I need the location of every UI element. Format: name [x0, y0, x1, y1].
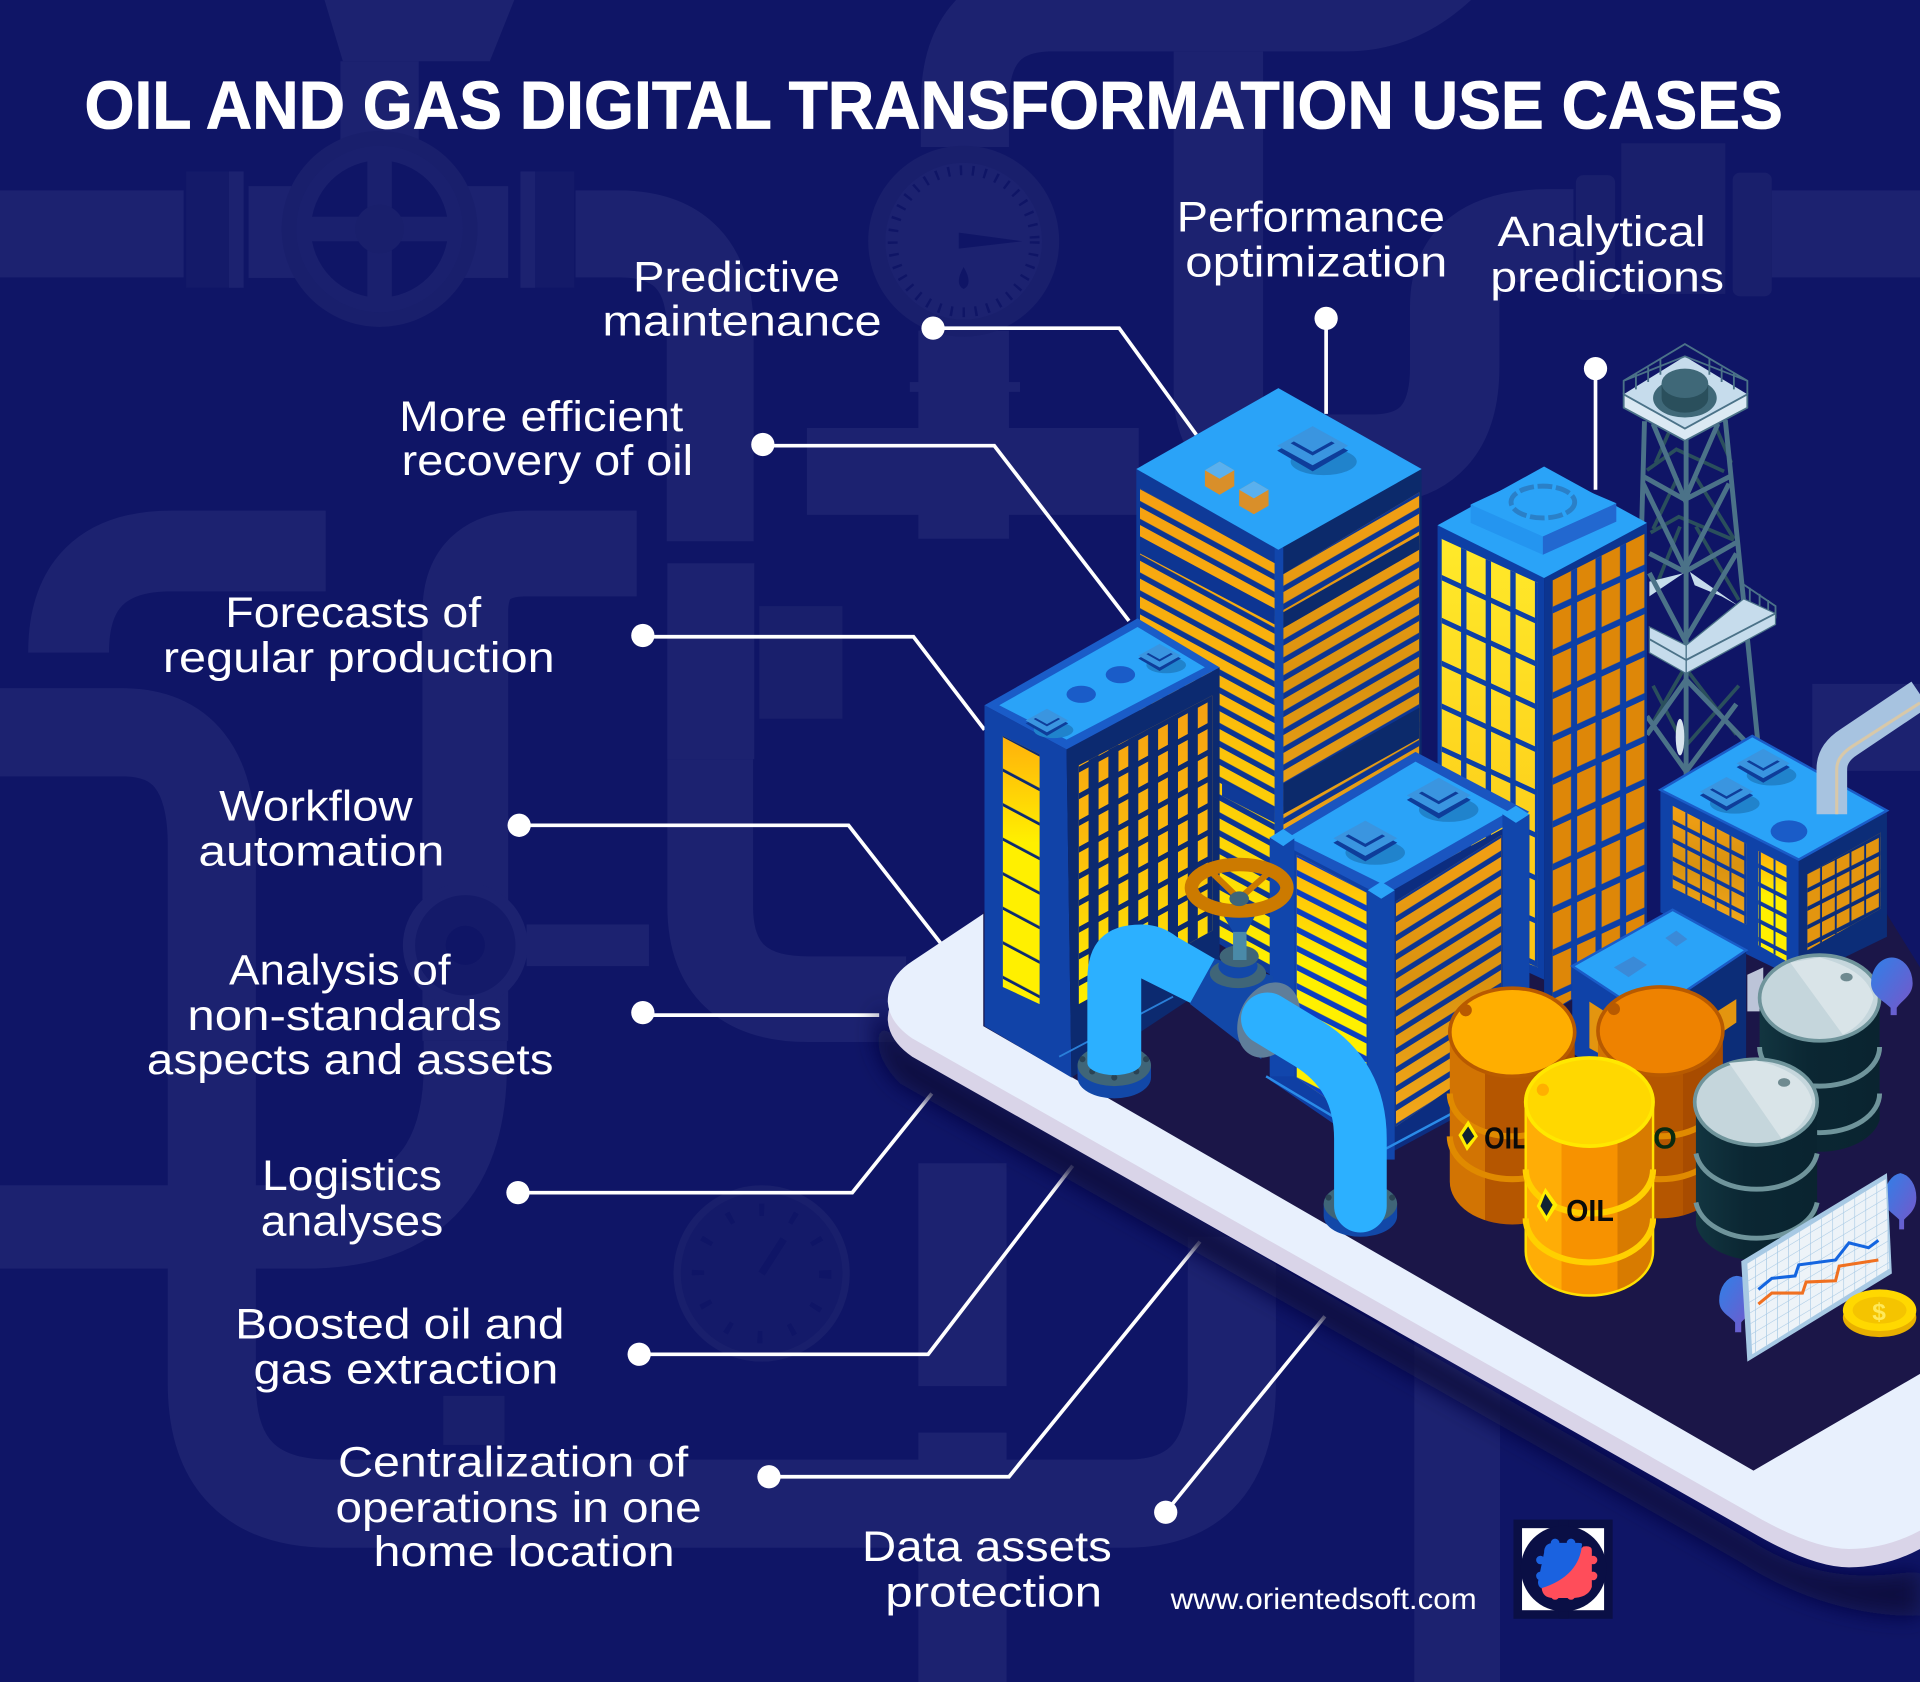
label: predictive maintenance: maintenance — [602, 298, 882, 346]
connector: workflow automation — [519, 825, 940, 943]
label: forecasts of regular production: regular production — [163, 634, 555, 682]
connector: centralization — [769, 1242, 1200, 1477]
hook — [1676, 719, 1684, 756]
base line — [1059, 997, 1173, 1057]
flange collar — [1225, 972, 1312, 1068]
oil rig tower — [1624, 344, 1776, 784]
label: data assets protection — [862, 1523, 1112, 1617]
label: performance optimization — [1177, 193, 1447, 287]
rooftop stack — [1277, 426, 1357, 475]
building: left front tower — [984, 618, 1220, 1078]
barrel: orange right — [1598, 987, 1723, 1218]
left flange — [1078, 1044, 1151, 1098]
rooftop stacks — [1737, 749, 1796, 786]
label: more efficient recovery of oil: recovery of oil — [402, 437, 693, 485]
label: forecasts of regular production: Forecasts of — [225, 589, 481, 637]
label: analytical predictions: Analytical — [1498, 208, 1706, 256]
label: logistics analyses — [261, 1152, 443, 1246]
rooftop stacks — [1407, 778, 1478, 822]
callout dots — [506, 307, 1607, 1524]
label: performance optimization: Performance — [1177, 193, 1445, 241]
label: forecasts of regular production — [163, 589, 555, 682]
building: center front tower — [1266, 752, 1531, 1160]
connector: data protection — [1166, 1316, 1325, 1512]
base line — [1266, 1071, 1531, 1149]
label: centralization of operations: operations in one — [336, 1484, 702, 1532]
valve body — [1190, 959, 1273, 1059]
coin — [1843, 1289, 1916, 1337]
building: tall striped tower — [1136, 388, 1422, 980]
mid platform rear deck — [1649, 572, 1739, 606]
barrel: orange left: OIL — [1484, 1122, 1528, 1156]
barrel: orange left — [1450, 988, 1575, 1224]
connector: analytical — [1594, 369, 1597, 490]
top platform railing — [1624, 344, 1747, 394]
connector: predictive maintenance — [933, 328, 1196, 435]
building: small right block with pipe — [1660, 694, 1920, 980]
label: performance optimization: optimization — [1185, 239, 1447, 287]
connector: analysis — [643, 1014, 879, 1017]
riser pipe — [1832, 694, 1920, 814]
orange line — [1758, 1260, 1878, 1304]
right pipe — [1267, 1019, 1360, 1206]
label: predictive maintenance — [602, 253, 882, 346]
barrel: yellow front: OIL — [1566, 1194, 1614, 1228]
oil barrels — [1450, 955, 1880, 1296]
top platform skirt — [1624, 394, 1747, 441]
valve wheel — [1191, 864, 1287, 911]
label: predictive maintenance: Predictive — [633, 253, 840, 301]
rooftop cap — [1471, 471, 1616, 555]
background valve and gauges — [186, 0, 1772, 1445]
label: analytical predictions: predictions — [1490, 253, 1724, 301]
label: analysis of non-standards aspects and assets: Analysis of — [229, 946, 451, 994]
label: data assets protection: protection — [885, 1569, 1102, 1617]
connector: logistics — [518, 1093, 932, 1193]
label: workflow automation: Workflow — [219, 782, 414, 830]
connector: performance — [1325, 318, 1328, 414]
label: boosted oil and gas extraction: gas extraction — [253, 1346, 558, 1394]
label: analysis of non-standards aspects and assets: non-standards — [187, 992, 502, 1040]
valve pipe — [1078, 864, 1397, 1237]
platform top — [888, 784, 1920, 1549]
mid platform railing — [1741, 583, 1776, 618]
label: centralization of operations: home location — [373, 1528, 675, 1576]
platform screen — [983, 796, 1920, 1471]
connector: forecasts — [643, 637, 984, 730]
blue line — [1758, 1240, 1878, 1289]
label: more efficient recovery of oil — [399, 393, 693, 485]
platform shadow — [877, 1004, 1920, 1616]
roof vent — [1771, 820, 1807, 842]
label: analytical predictions — [1490, 208, 1724, 301]
dome — [1653, 369, 1717, 418]
title: OIL AND GAS DIGITAL TRANSFORMATION USE CASES — [84, 69, 1783, 144]
barrel: dark front — [1695, 1059, 1817, 1260]
rear lattice — [1647, 424, 1739, 747]
connector: efficient recovery — [763, 446, 1129, 621]
logo gear — [1536, 1539, 1597, 1600]
left pipe — [1087, 924, 1215, 1075]
building: small front block — [1572, 910, 1763, 1127]
label: centralization of operations — [336, 1439, 702, 1576]
callout connector lines — [518, 318, 1596, 1512]
label: logistics analyses: Logistics — [262, 1152, 442, 1200]
label: analysis of non-standards aspects and assets: aspects and assets — [147, 1036, 553, 1084]
label: more efficient recovery of oil: More efficient — [399, 393, 683, 441]
building: tall window tower — [1438, 467, 1647, 1016]
platform side — [888, 931, 1920, 1567]
chart panel — [1741, 1173, 1892, 1362]
top platform deck — [1624, 356, 1747, 432]
label: workflow automation — [198, 782, 444, 876]
label: workflow automation: automation — [198, 828, 444, 876]
label: boosted oil and gas extraction — [235, 1300, 564, 1394]
rooftop items — [1026, 644, 1186, 738]
label: centralization of operations: Centralization of — [338, 1439, 688, 1487]
label: analysis of non-standards aspects and assets — [147, 946, 553, 1084]
mid platform front deck — [1649, 599, 1776, 673]
map pins — [1719, 958, 1916, 1332]
label: boosted oil and gas extraction: Boosted oil and — [235, 1300, 564, 1348]
connector: boosted extraction — [639, 1166, 1073, 1354]
main lattice — [1635, 420, 1758, 784]
barrel: dark rear — [1760, 955, 1880, 1152]
phone platform — [877, 784, 1920, 1616]
coin: $ — [1872, 1299, 1886, 1326]
label: logistics analyses: analyses — [261, 1198, 443, 1246]
website url: www.orientedsoft.com — [1170, 1583, 1477, 1616]
rooftop boxes — [1205, 462, 1269, 514]
barrel: yellow front — [1526, 1058, 1653, 1296]
label: data assets protection: Data assets — [862, 1523, 1112, 1571]
logo — [1513, 1520, 1613, 1619]
barrel: orange right: O — [1653, 1122, 1677, 1156]
right flange — [1324, 1183, 1397, 1237]
valve stem — [1210, 913, 1266, 988]
